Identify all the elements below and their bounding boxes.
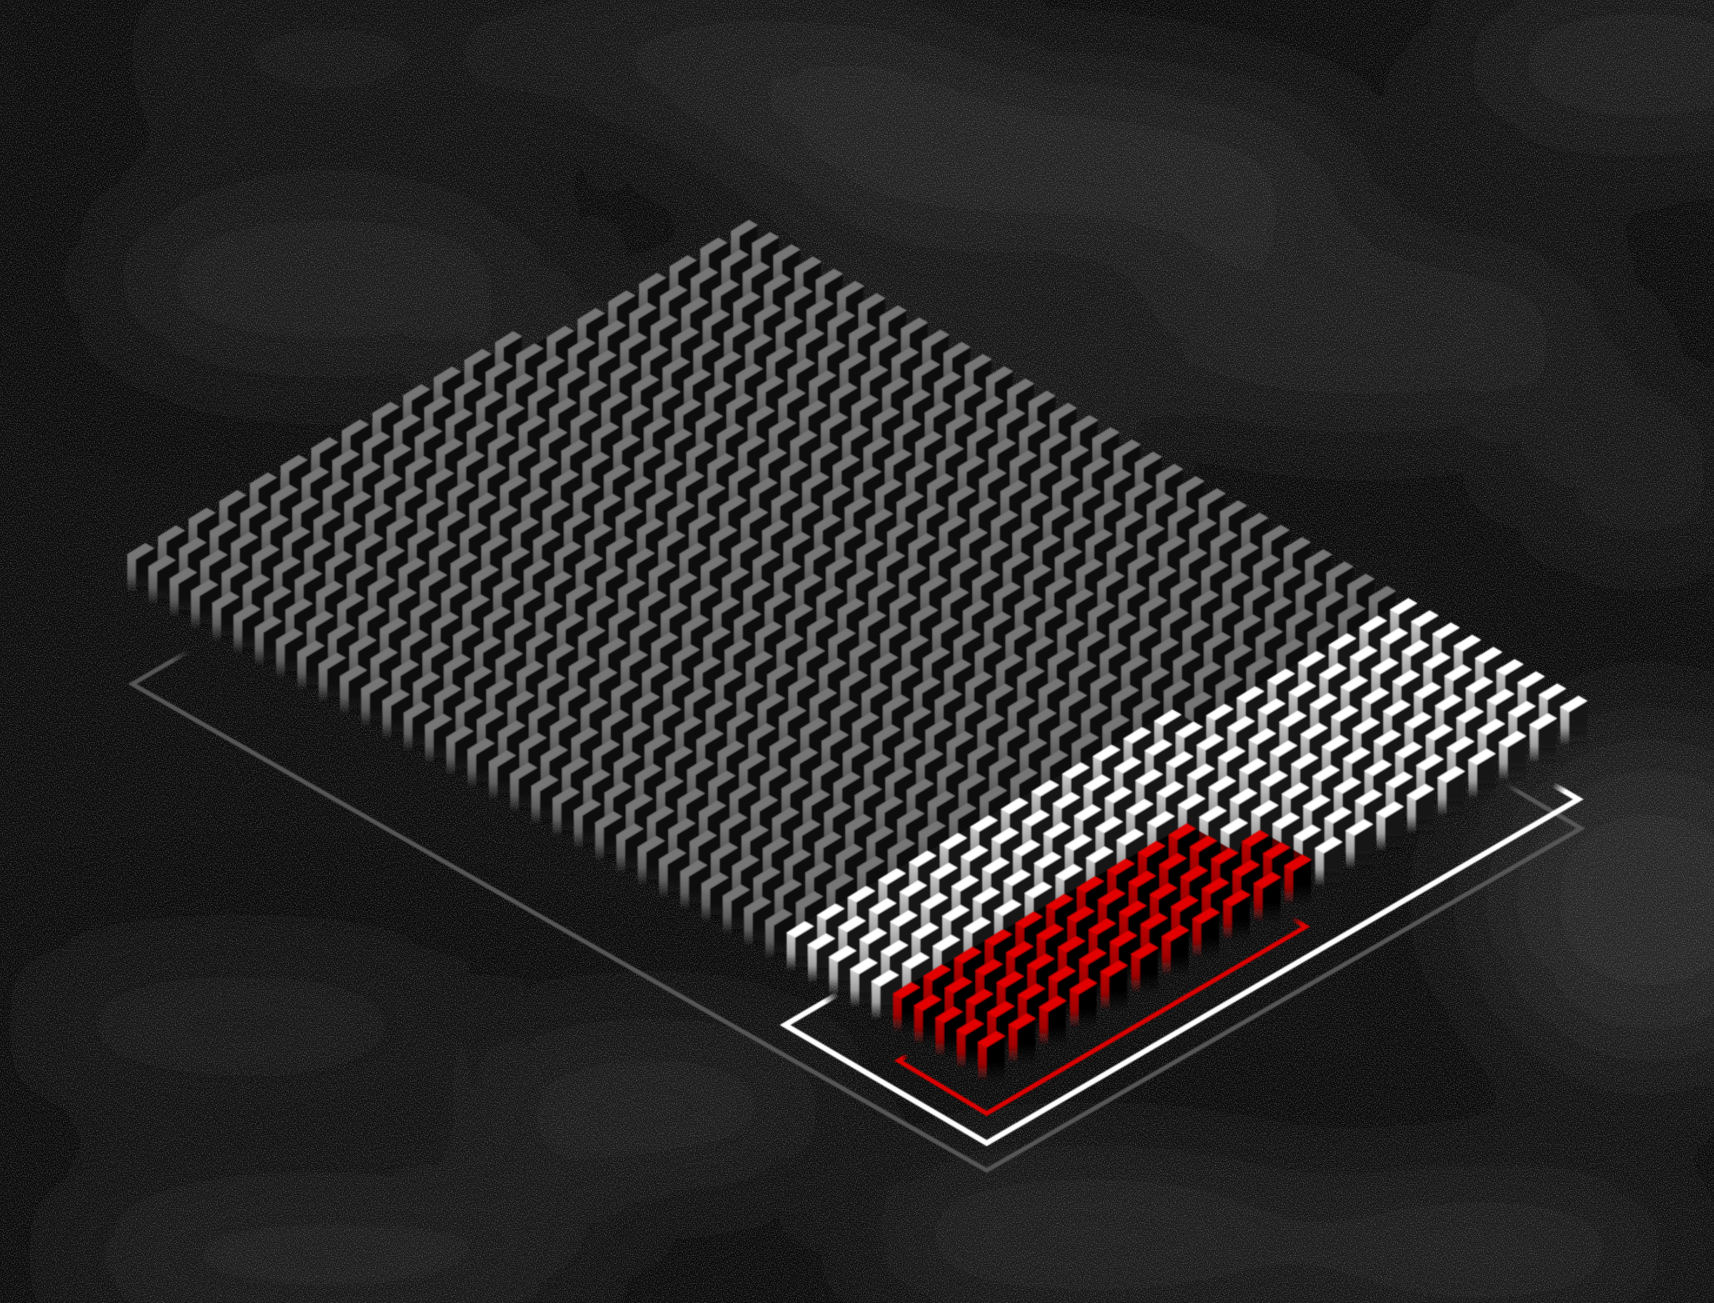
block group: red bars <box>893 824 1311 1091</box>
block group: white bars <box>787 598 1587 1047</box>
outline: white frame <box>785 774 1578 1143</box>
block group: gray bars <box>127 220 1396 969</box>
outline: gray base frame <box>132 636 1581 1170</box>
outline: red frame <box>899 908 1306 1114</box>
